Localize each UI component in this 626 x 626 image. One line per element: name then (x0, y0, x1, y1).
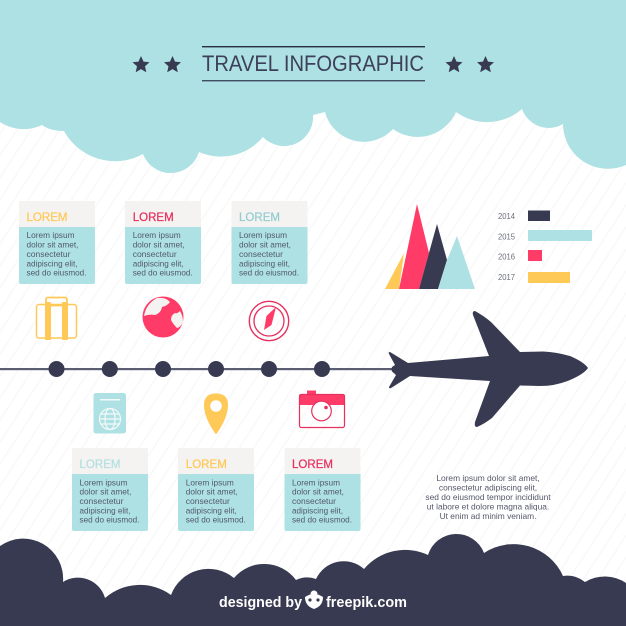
card 6: consectetur (292, 496, 336, 506)
card 5 (178, 448, 254, 531)
card 4: adipiscing elit, (80, 505, 130, 515)
card 2: dolor sit amet, (133, 240, 185, 250)
card 5: Lorem ipsum (186, 477, 234, 487)
card 4: LOREM (80, 457, 120, 471)
icon: globe (142, 296, 184, 338)
icon: suitcase (36, 298, 76, 340)
stars left (132, 56, 181, 72)
card 3 (232, 201, 308, 284)
card 5: consectetur (186, 496, 230, 506)
icon: passport (94, 393, 126, 434)
icon: freepik logo (305, 590, 323, 609)
paragraph: ut labore et dolore magna aliqua. (427, 502, 549, 512)
card 2: Lorem ipsum (133, 230, 181, 240)
card 6: sed do eiusmod. (292, 515, 352, 525)
bar legend: 2017 (498, 273, 516, 282)
card 1: consectetur (26, 249, 71, 259)
card 1: Lorem ipsum (26, 230, 74, 240)
footer credit: freepik.com (326, 595, 407, 611)
title: TRAVEL INFOGRAPHIC (202, 51, 424, 76)
card 1: dolor sit amet, (26, 240, 78, 250)
paragraph: consectetur adipiscing elit, (439, 482, 537, 492)
bar legend: 2014 (498, 212, 516, 221)
paragraph: sed do eiusmod tempor incididunt (425, 492, 551, 502)
card 1: adipiscing elit, (26, 258, 78, 268)
bottom cloud (0, 534, 626, 626)
card 5: sed do eiusmod. (186, 515, 246, 525)
card 5: adipiscing elit, (186, 505, 237, 515)
card 2: adipiscing elit, (133, 258, 184, 268)
card 2 (125, 201, 201, 284)
card 2: LOREM (133, 210, 174, 224)
card 4 (72, 448, 148, 531)
footer credit: designed by (219, 595, 302, 611)
card 2: consectetur (133, 249, 177, 259)
paragraph: Ut enim ad minim veniam. (440, 511, 536, 521)
card 1: LOREM (26, 210, 68, 224)
card 6: adipiscing elit, (292, 505, 343, 515)
card 5: dolor sit amet, (186, 487, 238, 497)
card 3: Lorem ipsum (239, 230, 287, 240)
timeline (0, 361, 395, 377)
bar legend (498, 210, 592, 283)
card 3: LOREM (239, 210, 280, 224)
card 5: LOREM (186, 457, 227, 471)
icon: compass (249, 301, 289, 341)
card 3: adipiscing elit, (239, 258, 290, 268)
bar legend: 2015 (498, 232, 516, 242)
bar legend: 2016 (498, 252, 516, 262)
card 3: consectetur (239, 249, 283, 259)
stars right (446, 56, 494, 72)
icon: camera (299, 390, 345, 428)
paragraph: Lorem ipsum dolor sit amet, (436, 473, 540, 483)
card 3: dolor sit amet, (239, 240, 291, 250)
card 6 (284, 448, 360, 531)
card 6: LOREM (292, 457, 333, 471)
footer credit (219, 590, 407, 611)
card 4: dolor sit amet, (80, 487, 132, 497)
card 6: Lorem ipsum (292, 477, 340, 487)
card 4: consectetur (80, 496, 124, 506)
top cloud (0, 0, 626, 173)
airplane (389, 311, 588, 427)
card 1 (19, 201, 95, 284)
card 1: sed do eiusmod. (26, 268, 86, 278)
card 4: sed do eiusmod. (80, 515, 140, 525)
triangle chart (385, 204, 475, 289)
icon: map pin (204, 394, 228, 434)
paragraph (425, 473, 551, 521)
card 2: sed do eiusmod. (133, 268, 193, 278)
card 4: Lorem ipsum (80, 477, 128, 487)
card 6: dolor sit amet, (292, 487, 344, 497)
card 3: sed do eiusmod. (239, 268, 299, 278)
